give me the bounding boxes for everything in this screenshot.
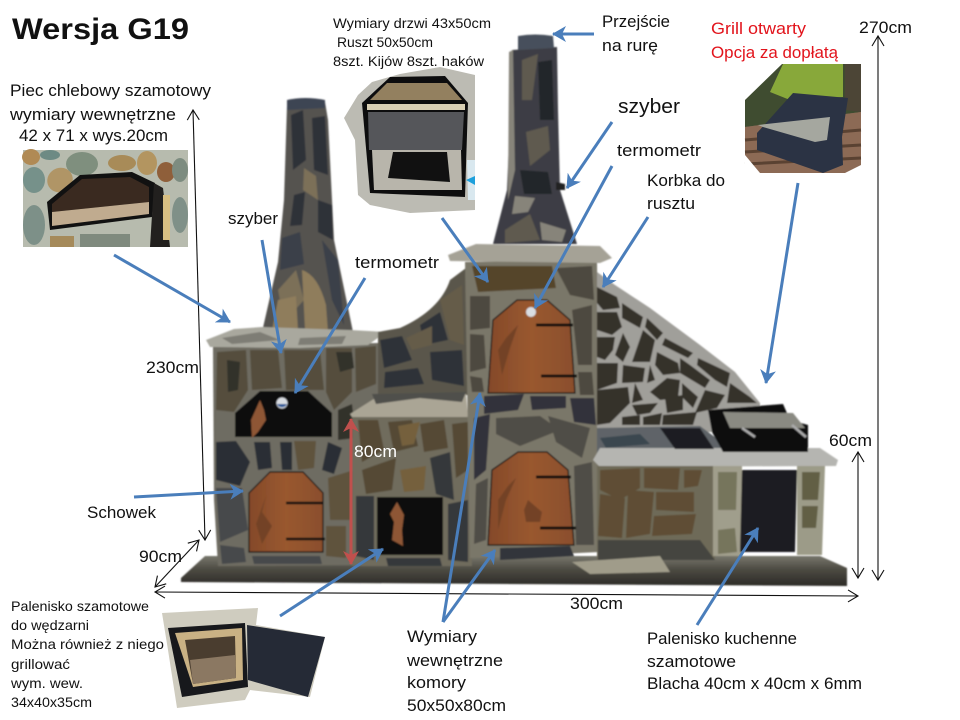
dimension: 60cm height line bbox=[857, 452, 859, 578]
label: door and grate dimensions: Wymiary drzwi 43x50cm bbox=[333, 16, 491, 31]
label: chimney pipe: Przejście bbox=[602, 13, 670, 31]
label: chamber dimensions: wewnętrzne bbox=[406, 652, 503, 670]
photo: open grill option bbox=[745, 64, 861, 173]
arrow: chamber lower bbox=[443, 550, 495, 622]
label: door and grate dimensions bbox=[333, 16, 491, 69]
label: 230cm: 230cm bbox=[146, 359, 199, 377]
label: 300cm: 300cm bbox=[570, 595, 623, 613]
open grill on counter bbox=[708, 404, 808, 452]
label: smoker firebox bbox=[10, 598, 164, 710]
middle connecting wall bbox=[378, 268, 468, 397]
label: bread oven: wymiary wewnętrzne bbox=[9, 106, 176, 124]
label: left thermometer: termometr bbox=[355, 254, 440, 272]
label: right thermometer: termometr bbox=[617, 142, 702, 160]
middle lower block bbox=[352, 417, 472, 566]
label: bread oven bbox=[9, 82, 212, 145]
oven black door bbox=[235, 391, 332, 438]
arrow: chamber upper bbox=[443, 393, 480, 622]
photo: smoker firebox bbox=[162, 608, 325, 708]
dimension: 80cm red arrow bbox=[350, 419, 352, 564]
upper tower door bbox=[488, 300, 577, 393]
label: grate crank bbox=[647, 172, 725, 213]
arrow: storage bbox=[134, 491, 243, 497]
label: door and grate dimensions: 8szt. Kijów 8szt. haków bbox=[333, 54, 484, 69]
label: smoker firebox: Palenisko szamotowe bbox=[11, 598, 149, 614]
arrow: kitchen firebox bbox=[697, 528, 758, 625]
arrow: grate crank bbox=[603, 217, 648, 287]
middle ledge bbox=[350, 394, 468, 417]
label: 80cm: 80cm bbox=[354, 443, 397, 461]
left oven block bbox=[213, 343, 380, 566]
label: smoker firebox: do wędzarni bbox=[11, 617, 89, 633]
label: kitchen firebox: szamotowe bbox=[647, 653, 736, 671]
label: open grill option: Grill otwarty bbox=[711, 20, 807, 38]
label: door and grate dimensions: Ruszt 50x50cm bbox=[337, 35, 433, 50]
left wooden door bbox=[249, 472, 325, 552]
dimension: 90cm depth line bbox=[155, 540, 199, 587]
label: chimney pipe bbox=[602, 13, 670, 55]
label: grate crank: rusztu bbox=[647, 195, 695, 213]
photo: grill chamber bbox=[344, 67, 475, 213]
label: chamber dimensions: komory bbox=[407, 674, 467, 692]
arrow: bread oven bbox=[114, 255, 230, 322]
countertop slab bbox=[593, 426, 838, 467]
title: Wersja G19 bbox=[12, 13, 189, 46]
barbecue structure photo bbox=[181, 34, 847, 586]
base plinth bbox=[181, 556, 847, 586]
small black door bbox=[377, 497, 443, 555]
left chimney bbox=[262, 98, 353, 332]
arrow: grill chamber bbox=[442, 218, 488, 282]
label: storage: Schowek bbox=[87, 504, 157, 522]
label: smoker firebox: wym. wew. bbox=[10, 675, 83, 691]
label: kitchen firebox bbox=[647, 630, 862, 693]
dimension: 300cm width line bbox=[155, 592, 858, 596]
arrow: chimney pipe bbox=[553, 32, 594, 36]
label: smoker firebox: grillować bbox=[11, 656, 70, 672]
label: right damper: szyber bbox=[618, 96, 680, 118]
label: smoker firebox: Można również z niego bbox=[11, 636, 164, 652]
label: chamber dimensions: 50x50x80cm bbox=[407, 697, 506, 715]
label: chamber dimensions bbox=[406, 628, 506, 715]
arrow: right damper bbox=[567, 122, 612, 188]
label: chimney pipe: na rurę bbox=[602, 37, 658, 55]
dimension: 270cm height line bbox=[877, 36, 879, 580]
label: open grill option: Opcja za dopłatą bbox=[711, 44, 839, 62]
label: open grill option bbox=[711, 20, 839, 62]
sloped stone wall bbox=[597, 272, 760, 432]
label: kitchen firebox: Palenisko kuchenne bbox=[647, 630, 797, 648]
arrow: right thermometer bbox=[535, 166, 612, 308]
label: grate crank: Korbka do bbox=[647, 172, 725, 190]
arrow: left thermometer bbox=[295, 278, 365, 393]
left oven roof slab bbox=[206, 327, 386, 348]
label: chamber dimensions: Wymiary bbox=[407, 628, 478, 646]
label: left damper: szyber bbox=[228, 210, 279, 228]
lower right recess bbox=[572, 466, 715, 574]
right chimney bbox=[493, 34, 577, 244]
label: 270cm: 270cm bbox=[859, 19, 912, 37]
dimension: 230cm height line bbox=[193, 110, 205, 540]
tower roof slab bbox=[448, 244, 612, 263]
label: 60cm: 60cm bbox=[829, 432, 872, 450]
arrow: left damper bbox=[262, 240, 281, 353]
label: bread oven: 42 x 71 x wys.20cm bbox=[19, 127, 168, 145]
photo: bread oven bbox=[22, 149, 188, 247]
label: 90cm: 90cm bbox=[139, 548, 182, 566]
label: bread oven: Piec chlebowy szamotowy bbox=[10, 82, 212, 100]
label: kitchen firebox: Blacha 40cm x 40cm x 6mm bbox=[647, 675, 862, 693]
tower bbox=[465, 260, 600, 560]
arrow: open grill bbox=[766, 183, 798, 383]
lower tower door bbox=[488, 452, 576, 545]
arrow: smoker firebox bbox=[280, 549, 383, 616]
fireplace door bbox=[740, 470, 797, 552]
label: smoker firebox: 34x40x35cm bbox=[11, 694, 92, 710]
fireplace pillars bbox=[713, 466, 825, 556]
